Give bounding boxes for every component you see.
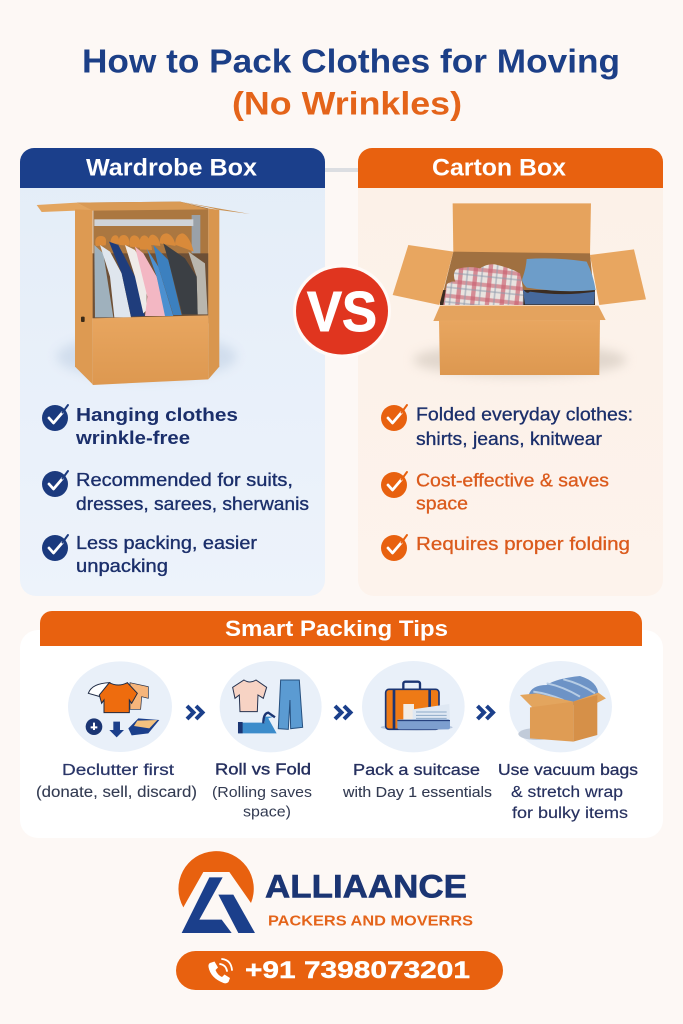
label: Declutter first (62, 762, 175, 779)
heading: smart packing tips: Smart Packing Tips (225, 616, 448, 641)
bullet: hanging clothes (42, 404, 238, 448)
bullet: folded everyday clothes: shirts, jeans, knitwear (416, 429, 602, 449)
tip 4: vacuum bags (498, 661, 638, 822)
panel header: wardrobe box: Wardrobe Box (86, 154, 258, 182)
icon: suitcase (362, 661, 465, 752)
phone number: +91 7398073201 (245, 957, 470, 984)
label: (donate, sell, discard) (36, 784, 197, 801)
tip 2: roll vs fold (212, 661, 322, 820)
label: Roll vs Fold (215, 761, 311, 778)
bullet: cost-effective: space (416, 494, 468, 514)
panel: carton box (358, 148, 663, 596)
label: for bulky items (512, 805, 628, 822)
VS badge (293, 264, 391, 358)
title: How to Pack Clothes for Moving (82, 44, 620, 80)
arrow (187, 706, 202, 719)
hanging clothes (88, 215, 208, 318)
bullet: less packing (42, 533, 257, 576)
logo mark (178, 851, 255, 933)
label: Use vacuum bags (498, 762, 638, 779)
panel header: carton box (358, 148, 663, 188)
bullet: hanging clothes: Hanging clothes (76, 404, 238, 425)
VS badge: VS (307, 280, 377, 344)
bullet list: carton box (381, 405, 633, 561)
folded shirt (443, 264, 523, 305)
label (342, 762, 492, 801)
label (498, 762, 638, 822)
tagline: PACKERS AND MOVERRS (268, 914, 473, 930)
title (82, 44, 620, 122)
bullet: cost-effective: Cost-effective & saves (416, 470, 609, 490)
folded jeans (522, 258, 596, 304)
panel header: carton box: Carton Box (432, 154, 567, 182)
logo: Alliaance Packers and Moverrs (178, 851, 473, 933)
arrow (478, 706, 493, 719)
icon: t-shirt and jeans (220, 661, 322, 752)
label: space) (243, 804, 291, 820)
bullet: less packing: unpacking (76, 556, 168, 576)
bullet: hanging clothes: wrinkle-free (75, 427, 190, 448)
icon: box with vacuum bags (509, 661, 612, 752)
title: (No Wrinkles) (232, 86, 462, 122)
label (36, 762, 197, 801)
label: (Rolling saves (212, 784, 312, 801)
bullet: less packing: Less packing, easier (76, 533, 257, 553)
bullet list: wardrobe box (42, 404, 309, 576)
panel: wardrobe box (20, 148, 325, 596)
bullet: recommended for suits: Recommended for suits, (76, 470, 293, 490)
icon: clothes and sorting (68, 661, 172, 752)
phone pill (176, 951, 503, 990)
illustration: open carton with folded clothes (393, 203, 646, 377)
panel header: wardrobe box (20, 148, 325, 188)
bullet: folded everyday clothes: Folded everyday clothes: (416, 405, 633, 425)
bullet: cost-effective (381, 470, 609, 514)
label: Pack a suitcase (353, 762, 480, 779)
label: with Day 1 essentials (342, 784, 492, 801)
label: & stretch wrap (511, 784, 623, 801)
heading: smart packing tips (40, 611, 642, 646)
panel: smart packing tips (20, 611, 663, 838)
bullet: recommended for suits (42, 470, 309, 514)
bullet: requires proper folding (381, 534, 630, 561)
tip 1: declutter first (36, 661, 197, 801)
bullet: requires proper folding: Requires proper folding (416, 534, 630, 554)
tip 3: pack a suitcase (342, 661, 492, 801)
bullet: folded everyday clothes (381, 405, 633, 449)
arrow (335, 706, 350, 719)
wordmark: ALLIAANCE (265, 869, 467, 905)
icon: phone (208, 959, 232, 983)
illustration: wardrobe box with hanging clothes (37, 202, 250, 385)
bullet: recommended for suits: dresses, sarees, sherwanis (76, 494, 309, 514)
label (212, 761, 312, 820)
